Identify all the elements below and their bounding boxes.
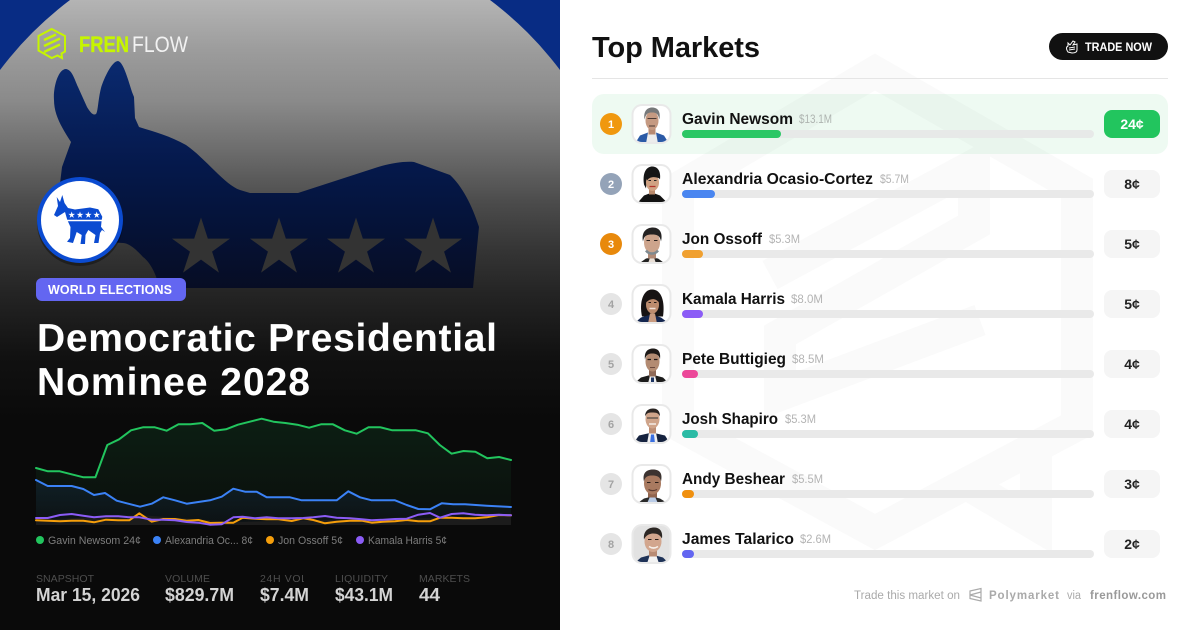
button: trade now [1049, 33, 1168, 60]
footer attribution: via [1067, 590, 1082, 602]
row 3: Jon Ossoff: $5.3M [769, 234, 800, 246]
avatar: Jon Ossoff [632, 224, 672, 264]
title [40, 322, 494, 396]
footer attribution [854, 588, 1166, 602]
row 8: James Talarico: 8 [608, 539, 614, 551]
row 7: Andy Beshear: 3¢ [1124, 476, 1140, 492]
logo: FrenFlow: FLOW [132, 32, 188, 57]
avatar: Gavin Newsom [632, 104, 672, 144]
row 1: Gavin Newsom: Gavin Newsom [682, 111, 793, 128]
footer attribution: frenflow.com [1090, 590, 1166, 602]
avatar: Andy Beshear [632, 464, 672, 504]
row 4: Kamala Harris: 4 [608, 299, 615, 311]
row 4: Kamala Harris: 5¢ [1124, 296, 1140, 312]
row 1: Gavin Newsom: $13.1M [799, 114, 832, 126]
stat: volume: VOLUME [165, 573, 210, 585]
row 2: Alexandria Ocasio-Cortez: $5.7M [880, 174, 909, 186]
row 8: James Talarico [600, 524, 1160, 564]
row 5: Pete Buttigieg [600, 344, 1160, 384]
stat: 24h volume: 24H VOL [260, 573, 307, 585]
stat: markets: 44 [419, 585, 440, 605]
stat: liquidity: LIQUIDITY [335, 573, 388, 585]
row 6: Josh Shapiro: 6 [608, 419, 614, 431]
row 2: Alexandria Ocasio-Cortez: Alexandria Ocasio-Cortez [682, 171, 873, 188]
stat: markets: MARKETS [419, 573, 470, 585]
row 5: Pete Buttigieg: Pete Buttigieg [682, 351, 786, 368]
row 8: James Talarico: 2¢ [1124, 536, 1140, 552]
row 3: Jon Ossoff: 5¢ [1124, 236, 1140, 252]
logo: FrenFlow [38, 29, 188, 58]
stat: 24h volume [260, 575, 308, 603]
row 2: Alexandria Ocasio-Cortez: 8¢ [1124, 176, 1140, 192]
stat: snapshot [36, 575, 140, 604]
row 1: Gavin Newsom: 24¢ [1120, 116, 1144, 132]
stat: markets [419, 575, 470, 601]
icon: Democratic party donkey badge [37, 177, 123, 266]
row 6: Josh Shapiro: $5.3M [785, 414, 816, 426]
chart legend [36, 536, 446, 544]
watermark logo [678, 72, 1077, 532]
category tag [36, 278, 186, 301]
row 4: Kamala Harris [600, 284, 1160, 324]
category tag: WORLD ELECTIONS [48, 283, 172, 297]
stat: liquidity [335, 575, 392, 603]
row 1: Gavin Newsom [592, 94, 1168, 154]
row 2: Alexandria Ocasio-Cortez: 2 [608, 179, 614, 191]
chart legend: Gavin Newsom 24¢ [48, 535, 141, 547]
row 6: Josh Shapiro: 4¢ [1124, 416, 1140, 432]
row 7: Andy Beshear: 7 [608, 479, 614, 491]
avatar: Kamala Harris [632, 284, 672, 324]
row 3: Jon Ossoff: Jon Ossoff [682, 231, 763, 248]
stat: 24h volume: $7.4M [260, 585, 309, 605]
button: trade now: TRADE NOW [1085, 40, 1153, 54]
avatar: Josh Shapiro [632, 404, 672, 444]
row 5: Pete Buttigieg: 5 [608, 359, 614, 371]
icon: Polymarket [970, 588, 981, 601]
panel: right top markets [592, 33, 1168, 602]
title: Nominee 2028 [37, 361, 310, 404]
donkey silhouette background [54, 61, 479, 288]
row 7: Andy Beshear: Andy Beshear [682, 471, 785, 488]
row 8: James Talarico: $2.6M [800, 534, 831, 546]
row 3: Jon Ossoff: 3 [608, 239, 614, 251]
stat: volume [165, 575, 233, 603]
row 4: Kamala Harris: $8.0M [791, 294, 823, 306]
chart legend: Jon Ossoff 5¢ [278, 535, 343, 547]
row 3: Jon Ossoff [600, 224, 1160, 264]
chart legend: Alexandria Oc... 8¢ [165, 535, 253, 547]
header divider [592, 78, 1168, 80]
line chart: price history [36, 419, 511, 525]
row 7: Andy Beshear [600, 464, 1160, 504]
logo: FrenFlow: FREN [79, 32, 129, 57]
chart legend: Kamala Harris 5¢ [368, 535, 447, 547]
row 2: Alexandria Ocasio-Cortez [600, 164, 1160, 204]
row 7: Andy Beshear: $5.5M [792, 474, 823, 486]
stats row [36, 573, 470, 605]
title: Democratic Presidential [37, 317, 497, 360]
avatar: Pete Buttigieg [632, 344, 672, 384]
avatar: James Talarico [632, 524, 672, 564]
row 6: Josh Shapiro: Josh Shapiro [682, 411, 778, 428]
row 5: Pete Buttigieg: 4¢ [1124, 356, 1140, 372]
avatar: Alexandria Ocasio-Cortez [632, 164, 672, 204]
stat: snapshot: Mar 15, 2026 [36, 585, 140, 605]
row 1: Gavin Newsom: 1 [608, 119, 614, 131]
stat: liquidity: $43.1M [335, 585, 393, 605]
row 5: Pete Buttigieg: $8.5M [792, 354, 824, 366]
heading: Top Markets: Top Markets [592, 32, 760, 64]
row 6: Josh Shapiro [600, 404, 1160, 444]
footer attribution: Trade this market on [854, 590, 960, 602]
panel: left dark hero [0, 0, 560, 630]
stat: volume: $829.7M [165, 585, 234, 605]
stat: snapshot: SNAPSHOT [36, 573, 95, 585]
footer attribution: Polymarket [989, 590, 1059, 602]
row 4: Kamala Harris: Kamala Harris [682, 291, 785, 308]
row 8: James Talarico: James Talarico [682, 531, 794, 548]
